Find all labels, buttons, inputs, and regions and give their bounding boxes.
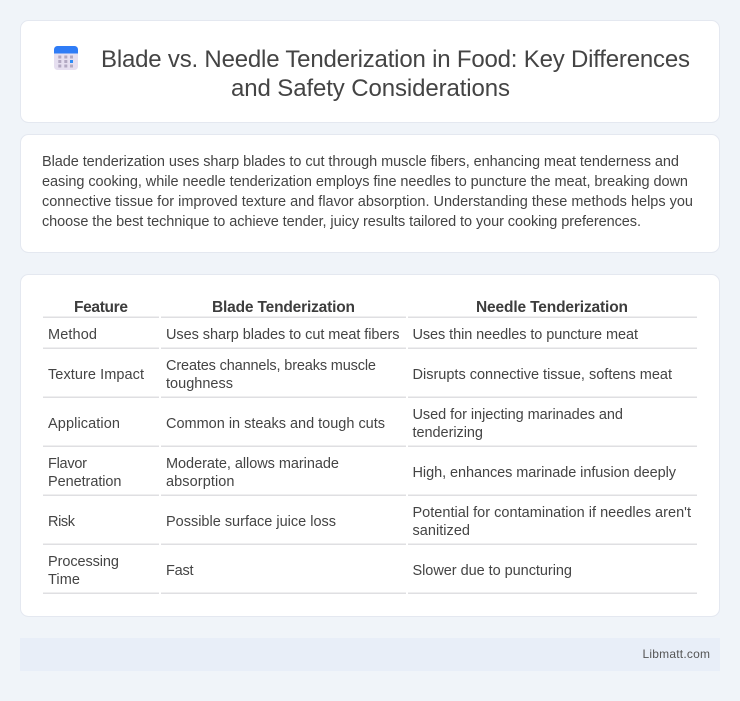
icon: calendar [54, 46, 78, 70]
intro paragraph: connective tissue for improved texture and flavor absorption. Understanding these methods helps you [42, 194, 693, 210]
panel: comparison table [20, 274, 720, 616]
row: method [48, 327, 638, 343]
table header row: Blade Tenderization [212, 299, 355, 316]
row: application [48, 407, 623, 441]
table header row: Needle Tenderization [476, 299, 628, 316]
row: risk: Potential for contamination if needles aren't [412, 505, 691, 521]
panel: title card [20, 20, 720, 122]
row: flavor penetration: absorption [166, 474, 234, 490]
row: processing time: Processing [48, 554, 119, 570]
row: flavor penetration: High, enhances marinade infusion deeply [412, 465, 677, 481]
row: risk: Possible surface juice loss [166, 514, 336, 530]
row: application: tenderizing [412, 425, 483, 441]
row: flavor penetration: Moderate, allows marinade [166, 456, 339, 472]
footer [20, 638, 720, 671]
row: texture impact [48, 358, 672, 392]
row: risk: Risk [48, 514, 76, 530]
row: method: Method [48, 327, 97, 343]
row: processing time [48, 554, 572, 588]
footer: Libmatt.com [642, 647, 710, 661]
table header row [74, 299, 628, 316]
row: texture impact: toughness [166, 376, 233, 392]
row: processing time: Fast [166, 563, 194, 579]
row: processing time: Slower due to puncturing [412, 563, 572, 579]
row: risk [48, 505, 691, 539]
panel: introduction [20, 134, 720, 252]
row: processing time: Time [48, 572, 80, 588]
intro paragraph: Blade tenderization uses sharp blades to cut through muscle fibers, enhancing meat tenderness and [42, 154, 679, 170]
row: application: Application [48, 416, 120, 432]
row: flavor penetration: Penetration [48, 474, 122, 490]
row: flavor penetration: Flavor [48, 456, 87, 472]
title text: Blade vs. Needle Tenderization in Food: Key Differences [101, 46, 690, 73]
row: application: Common in steaks and tough cuts [166, 416, 385, 432]
intro paragraph [42, 154, 693, 230]
row: flavor penetration [48, 456, 677, 490]
table header row: Feature [74, 299, 128, 316]
title text: and Safety Considerations [231, 75, 510, 102]
row: texture impact: Creates channels, breaks muscle [166, 358, 376, 374]
row: risk: sanitized [412, 523, 470, 539]
intro paragraph: choose the best technique to achieve tender, juicy results tailored to your cooking preferences. [42, 214, 641, 230]
intro paragraph: easing cooking, while needle tenderization employs fine needles to puncture the meat, breaking down [42, 174, 688, 190]
row: application: Used for injecting marinades and [412, 407, 623, 423]
row: method: Uses sharp blades to cut meat fibers [166, 327, 400, 343]
row: texture impact: Texture Impact [48, 367, 144, 383]
row: method: Uses thin needles to puncture meat [412, 327, 638, 343]
title text [101, 46, 690, 102]
row: texture impact: Disrupts connective tissue, softens meat [412, 367, 672, 383]
